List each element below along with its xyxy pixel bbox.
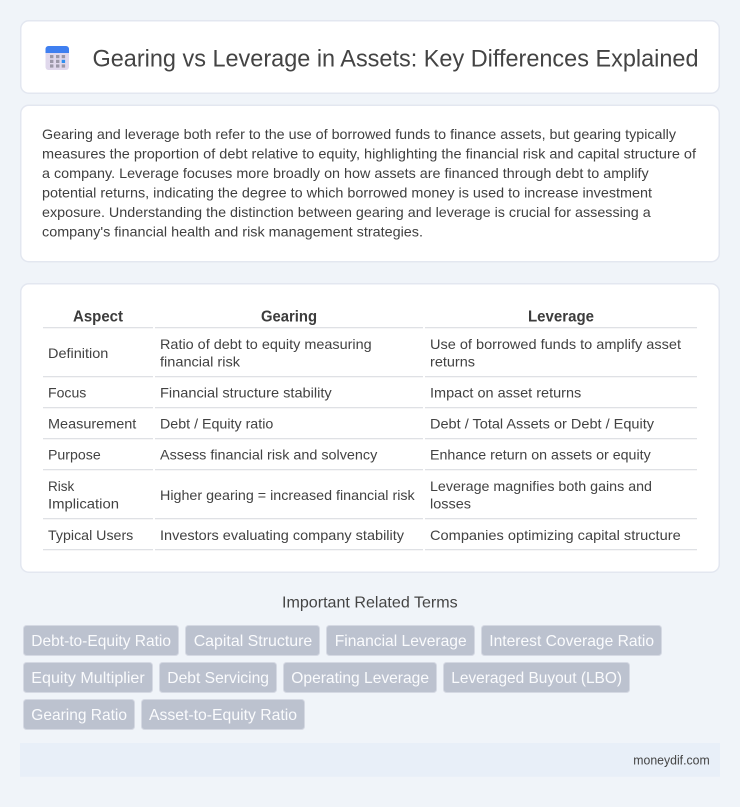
table row: Focus <box>48 385 581 401</box>
text block: introduction paragraph: exposure. Understanding the distinction between gearing and leverage is crucial for assessing a <box>42 204 651 220</box>
table row: Risk Implication: Risk <box>48 478 75 494</box>
table row: Typical Users <box>48 527 681 543</box>
table row: Purpose: Enhance return on assets or equity <box>430 447 651 463</box>
table row: Typical Users: Typical Users <box>48 527 133 543</box>
tag: Debt-to-Equity Ratio: Debt-to-Equity Ratio <box>31 633 171 650</box>
table header row: Leverage <box>528 309 594 326</box>
text block: introduction paragraph: measures the proportion of debt relative to equity, highlighting the financial risk and capital structure of <box>42 146 696 162</box>
text block: introduction paragraph: company's financial health and risk management strategies. <box>42 224 423 240</box>
panel: comparison table <box>21 284 719 572</box>
table row: Risk Implication: Leverage magnifies both gains and <box>430 478 652 494</box>
table header row <box>73 309 594 326</box>
tag: Asset-to-Equity Ratio: Asset-to-Equity Ratio <box>149 707 297 724</box>
tag: Leveraged Buyout (LBO): Leveraged Buyout (LBO) <box>451 670 622 687</box>
tag: Operating Leverage <box>284 662 436 692</box>
footer source text: moneydif.com <box>633 753 710 767</box>
table header row: Gearing <box>261 309 317 326</box>
table row: Risk Implication <box>48 478 652 512</box>
tag: Interest Coverage Ratio: Interest Coverage Ratio <box>489 633 654 650</box>
tag: Financial Leverage: Financial Leverage <box>335 633 467 650</box>
text block: introduction paragraph <box>42 126 696 240</box>
table row: Typical Users: Companies optimizing capital structure <box>430 527 681 543</box>
tag: Debt-to-Equity Ratio <box>24 626 178 656</box>
table row: Definition: returns <box>430 354 475 370</box>
table row: Measurement <box>48 416 654 432</box>
table row: Definition <box>48 336 681 370</box>
table row: Definition: Use of borrowed funds to amplify asset <box>430 336 681 352</box>
table row: Definition: Ratio of debt to equity measuring <box>160 336 372 352</box>
tag: Asset-to-Equity Ratio <box>142 700 304 730</box>
table row: Focus: Financial structure stability <box>160 385 332 401</box>
tag: Equity Multiplier: Equity Multiplier <box>31 670 145 687</box>
table row: Focus: Focus <box>48 385 86 401</box>
tag: Financial Leverage <box>326 626 474 656</box>
table row: Purpose: Assess financial risk and solvency <box>160 447 377 463</box>
tag: Equity Multiplier <box>24 662 152 692</box>
table row: Purpose: Purpose <box>48 447 101 463</box>
table row: Measurement: Debt / Equity ratio <box>160 416 274 432</box>
table row: Risk Implication: losses <box>430 496 471 512</box>
tag: Debt Servicing <box>160 662 276 692</box>
text block: introduction paragraph: Gearing and leverage both refer to the use of borrowed funds to finance assets, but gearing typically <box>42 126 676 142</box>
panel: introduction <box>21 105 719 262</box>
tag: Gearing Ratio: Gearing Ratio <box>31 707 127 724</box>
related terms tags <box>24 626 662 730</box>
tag: Leveraged Buyout (LBO) <box>444 662 630 692</box>
table row: Typical Users: Investors evaluating company stability <box>160 527 404 543</box>
tag: Operating Leverage: Operating Leverage <box>291 670 429 687</box>
title: Gearing vs Leverage in Assets: Key Differences Explained <box>92 46 698 73</box>
panel: header <box>21 21 719 93</box>
footer <box>20 743 720 777</box>
tag: Interest Coverage Ratio <box>482 626 662 656</box>
table row: Definition: Definition <box>48 345 108 361</box>
tag: Capital Structure: Capital Structure <box>194 633 312 650</box>
table row: Focus: Impact on asset returns <box>430 385 581 401</box>
table row: Risk Implication: Higher gearing = increased financial risk <box>160 487 416 503</box>
table row: Measurement: Debt / Total Assets or Debt / Equity <box>430 416 654 432</box>
icon: calendar <box>46 46 69 70</box>
heading: related terms: Important Related Terms <box>282 594 458 611</box>
tag: Capital Structure <box>186 626 320 656</box>
table row: Measurement: Measurement <box>48 416 136 432</box>
text block: introduction paragraph: a company. Leverage focuses more broadly on how assets are financed through debt to amplify <box>42 165 649 181</box>
tag: Debt Servicing: Debt Servicing <box>167 670 269 687</box>
text block: introduction paragraph: potential returns, indicating the degree to which borrowed money is used to increase investment <box>42 184 652 200</box>
table row: Risk Implication: Implication <box>48 496 119 512</box>
table row: Purpose <box>48 447 651 463</box>
table row: Definition: financial risk <box>160 354 241 370</box>
tag: Gearing Ratio <box>24 700 134 730</box>
table header row: Aspect <box>73 309 124 326</box>
